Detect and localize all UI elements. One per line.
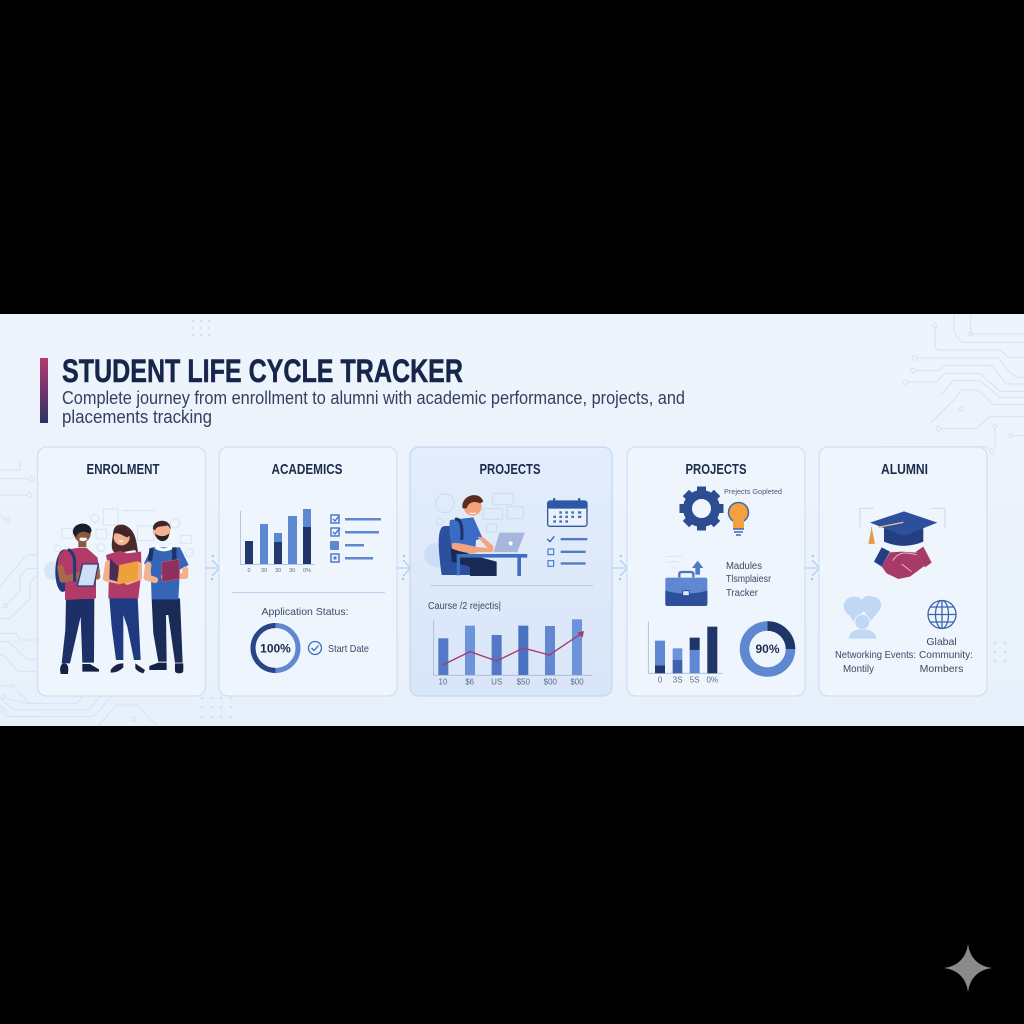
stacked bar chart: 0	[658, 675, 663, 684]
arrow: projects to alumni	[805, 555, 820, 580]
combo chart	[434, 619, 593, 687]
heading: academics: ACADEMICS	[272, 461, 342, 478]
stacked bar chart: 5S	[690, 675, 700, 684]
calendar and tasks	[547, 498, 587, 566]
combo chart: $00	[544, 678, 558, 687]
heading: enrolment: ENROLMENT	[86, 461, 160, 478]
illustration: student at laptop	[424, 493, 527, 576]
student three	[144, 521, 189, 673]
label: global community: Glabal	[926, 636, 957, 648]
combo chart: US	[491, 678, 502, 687]
bar chart	[240, 509, 315, 574]
stacked bar chart: 0%	[707, 675, 718, 684]
title: STUDENT LIFE CYCLE TRACKER	[62, 353, 463, 389]
icon: networking people	[844, 596, 881, 639]
donut: 100 percent: 100%	[260, 642, 291, 656]
module list text: Tlsmplaiesr	[726, 574, 772, 585]
donut: 90 percent	[744, 626, 790, 672]
bar chart: 30	[275, 568, 281, 574]
bar chart: 0	[247, 568, 251, 574]
icon: sparkle watermark	[944, 944, 992, 992]
subtitle: Complete journey from enrollment to alumni with academic performance, projects, and	[62, 388, 685, 408]
start date check	[308, 642, 369, 655]
module list text: Tracker	[726, 588, 759, 599]
combo chart: $50	[517, 678, 531, 687]
illustration: three students	[44, 509, 193, 674]
combo chart: $6	[465, 678, 475, 687]
student two	[106, 525, 145, 673]
start date check: Start Date	[328, 643, 369, 655]
application status label: Application Status:	[262, 606, 348, 618]
donut: 100 percent	[253, 626, 298, 670]
stacked bar chart: 3S	[673, 675, 683, 684]
panel: projects tracker	[627, 447, 805, 696]
icon: globe	[928, 600, 956, 628]
bar chart: 30	[289, 568, 295, 574]
title accent bar	[40, 358, 48, 423]
panel: enrolment	[38, 447, 206, 696]
subtitle: placements tracking	[62, 407, 212, 427]
panel: academics	[219, 447, 397, 696]
icon: light bulb	[728, 502, 748, 535]
label: networking events: Montily	[843, 663, 875, 675]
bar chart: 30	[261, 568, 267, 574]
arrow: academics to projects	[397, 555, 410, 580]
stacked bar chart	[648, 622, 723, 684]
icon: graduation cap and handshake	[860, 508, 945, 579]
module list text: Madules	[726, 561, 762, 572]
label: projects completed: Prejects Gopleted	[724, 489, 782, 496]
label: networking events: Networking Events:	[835, 649, 916, 661]
heading: alumni: ALUMNI	[881, 461, 928, 478]
icon: briefcase with arrow	[665, 556, 707, 606]
chart label: Caurse /2 rejectis|	[428, 600, 501, 612]
label: global community: Mombers	[920, 663, 963, 675]
donut: 90 percent: 90%	[755, 642, 780, 656]
panel: projects highlighted	[410, 447, 612, 696]
bar chart: 0%	[303, 568, 311, 574]
background band	[0, 314, 1024, 726]
icon: gear	[680, 486, 724, 530]
checklist	[330, 515, 381, 562]
combo chart: $00	[570, 678, 584, 687]
heading: projects: PROJECTS	[480, 461, 540, 478]
arrow: enrolment to academics	[206, 555, 220, 580]
module list text	[726, 561, 772, 599]
arrow: projects to second projects	[612, 555, 628, 580]
label: global community: Community:	[919, 649, 973, 661]
heading: projects: PROJECTS	[686, 461, 746, 478]
combo chart: 10	[439, 678, 448, 687]
panel: alumni	[819, 447, 987, 696]
student one	[55, 524, 100, 674]
